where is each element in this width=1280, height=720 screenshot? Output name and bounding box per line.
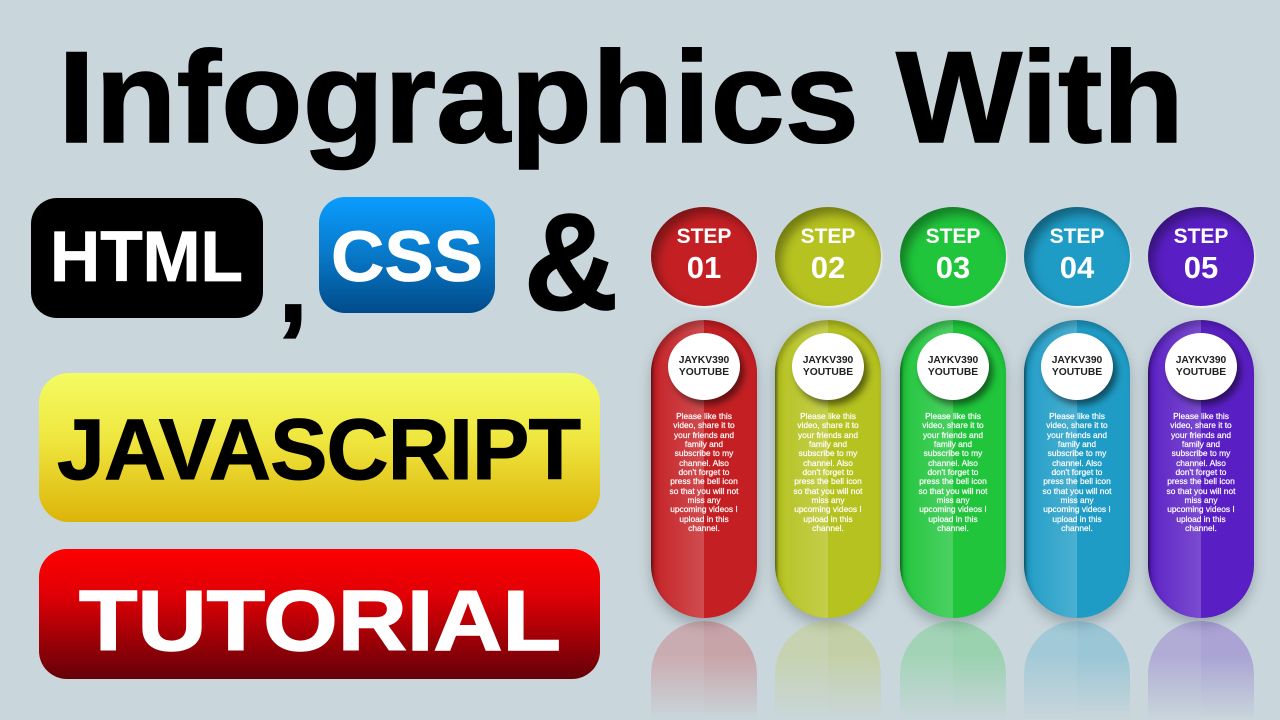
step circle 03: STEP: [926, 225, 980, 248]
logo badge 04: YOUTUBE: [1052, 367, 1102, 378]
step circle 01: STEP: [677, 225, 731, 248]
step circle 05: STEP: [1174, 225, 1228, 248]
capsule text 05: so that you will not: [1167, 486, 1235, 496]
capsule text 05: miss any: [1184, 495, 1218, 505]
capsule text 01: video, share it to: [673, 420, 735, 430]
logo badge 04: [1041, 333, 1113, 400]
capsule text 04: Please like this: [1049, 411, 1105, 421]
step circle 02: 02: [811, 250, 845, 285]
label: JavaScript: JAVASCRIPT: [57, 402, 581, 498]
capsule text 02: upcoming videos I: [794, 504, 862, 514]
capsule text 03: channel.: [937, 523, 969, 533]
ampersand: &: [524, 186, 618, 339]
logo badge 03: [917, 333, 989, 400]
logo badge 03: YOUTUBE: [928, 367, 978, 378]
step circle 02: [775, 207, 881, 306]
logo badge 02: YOUTUBE: [803, 367, 853, 378]
capsule text 05: your friends and: [1171, 430, 1231, 440]
logo badge 02: [792, 333, 864, 400]
label: CSS: CSS: [331, 218, 483, 297]
step circle 02: STEP: [801, 225, 855, 248]
logo badge 05: JAYKV390: [1176, 355, 1226, 366]
capsule text 03: family and: [934, 439, 972, 449]
capsule text 01: channel.: [688, 523, 720, 533]
capsule text 05: Please like this: [1173, 411, 1229, 421]
step column 02: [770, 207, 886, 710]
capsule text 03: Please like this: [925, 411, 981, 421]
capsule text 02: don't forget to: [803, 467, 853, 477]
capsule text 05: channel. Also: [1176, 458, 1226, 468]
capsule text 02: channel.: [812, 523, 844, 533]
capsule text 01: channel. Also: [679, 458, 729, 468]
step circle 04: 04: [1060, 250, 1094, 285]
badge: HTML background: [31, 198, 263, 318]
comma: ,: [275, 202, 311, 348]
capsule text 03: your friends and: [923, 430, 983, 440]
step circle 03: 03: [936, 250, 970, 285]
step circle 04: STEP: [1050, 225, 1104, 248]
capsule text 04: upcoming videos I: [1043, 504, 1111, 514]
capsule text 01: upload in this: [679, 514, 729, 524]
logo badge 01: YOUTUBE: [679, 367, 729, 378]
capsule text 03: video, share it to: [922, 420, 984, 430]
step circle 04: [1024, 207, 1130, 306]
logo badge 03: JAYKV390: [928, 355, 978, 366]
capsule text 05: channel.: [1185, 523, 1217, 533]
capsule text 02: press the bell icon: [794, 476, 862, 486]
capsule text 01: your friends and: [674, 430, 734, 440]
capsule text 01: miss any: [687, 495, 721, 505]
reflection 05: [1148, 621, 1254, 709]
capsule text 03: so that you will not: [919, 486, 987, 496]
banner: JavaScript background: [39, 373, 600, 522]
capsule text 02: miss any: [811, 495, 845, 505]
capsule text 05: family and: [1182, 439, 1220, 449]
capsule text 04: your friends and: [1047, 430, 1107, 440]
capsule text 02: [794, 411, 862, 533]
label: Tutorial: TUTORIAL: [79, 574, 561, 669]
step column 03: [894, 207, 1012, 708]
capsule text 02: so that you will not: [794, 486, 862, 496]
capsule text 05: press the bell icon: [1167, 476, 1235, 486]
capsule 01: [651, 320, 757, 618]
step circle 03: [900, 207, 1006, 306]
capsule text 04: video, share it to: [1046, 420, 1108, 430]
capsule text 04: press the bell icon: [1043, 476, 1111, 486]
capsule text 03: channel. Also: [928, 458, 978, 468]
capsule text 04: so that you will not: [1043, 486, 1111, 496]
capsule text 03: upload in this: [928, 514, 978, 524]
logo badge 01: JAYKV390: [679, 355, 729, 366]
capsule text 04: family and: [1058, 439, 1096, 449]
capsule 05: [1148, 320, 1254, 618]
step circle 01: [651, 207, 757, 306]
capsule text 05: upload in this: [1176, 514, 1226, 524]
capsule text 04: channel.: [1061, 523, 1093, 533]
capsule text 01: don't forget to: [679, 467, 729, 477]
capsule text 05: video, share it to: [1170, 420, 1232, 430]
step column 04: [1018, 207, 1136, 709]
capsule text 05: upcoming videos I: [1167, 504, 1235, 514]
badge: CSS background: [319, 197, 495, 313]
capsule 02: [775, 320, 881, 618]
capsule text 05: don't forget to: [1176, 467, 1226, 477]
capsule 04: [1024, 320, 1130, 618]
capsule text 02: channel. Also: [803, 458, 853, 468]
capsule text 03: miss any: [936, 495, 970, 505]
capsule text 03: subscribe to my: [924, 448, 982, 458]
capsule text 03: press the bell icon: [919, 476, 987, 486]
capsule text 04: [1042, 411, 1112, 533]
logo badge 05: YOUTUBE: [1176, 367, 1226, 378]
capsule text 02: family and: [809, 439, 847, 449]
capsule text 02: Please like this: [800, 411, 856, 421]
capsule 03: [900, 320, 1006, 618]
capsule text 01: subscribe to my: [675, 448, 733, 458]
capsule text 05: subscribe to my: [1172, 448, 1230, 458]
capsule text 03: don't forget to: [928, 467, 978, 477]
capsule text 04: subscribe to my: [1048, 448, 1106, 458]
capsule text 01: Please like this: [676, 411, 732, 421]
banner: Tutorial background: [39, 549, 600, 679]
logo badge 04: JAYKV390: [1052, 355, 1102, 366]
step circle 05: [1148, 207, 1254, 306]
label: HTML: HTML: [50, 218, 243, 297]
logo badge 02: JAYKV390: [803, 355, 853, 366]
capsule text 01: so that you will not: [670, 486, 738, 496]
capsule text 01: family and: [685, 439, 723, 449]
reflection 02: [775, 621, 881, 710]
logo badge 01: [668, 333, 740, 400]
step column 01: [646, 207, 762, 709]
reflection 01: [651, 621, 757, 709]
capsule text 03: [918, 411, 988, 533]
capsule text 04: miss any: [1060, 495, 1094, 505]
capsule text 03: upcoming videos I: [919, 504, 987, 514]
step circle 01: 01: [687, 250, 721, 285]
capsule text 02: your friends and: [798, 430, 858, 440]
capsule text 04: channel. Also: [1052, 458, 1102, 468]
step column 05: [1142, 207, 1260, 709]
capsule text 02: upload in this: [803, 514, 853, 524]
capsule text 01: [670, 411, 738, 533]
capsule text 05: [1166, 411, 1236, 533]
reflection 03: [900, 621, 1006, 708]
capsule text 04: upload in this: [1052, 514, 1102, 524]
logo badge 05: [1165, 333, 1237, 400]
capsule text 02: subscribe to my: [799, 448, 857, 458]
capsule text 01: press the bell icon: [670, 476, 738, 486]
capsule text 02: video, share it to: [797, 420, 859, 430]
capsule text 04: don't forget to: [1052, 467, 1102, 477]
reflection 04: [1024, 621, 1130, 709]
step circle 05: 05: [1184, 250, 1218, 285]
capsule text 01: upcoming videos I: [670, 504, 738, 514]
title: Infographics With: [58, 24, 1184, 170]
